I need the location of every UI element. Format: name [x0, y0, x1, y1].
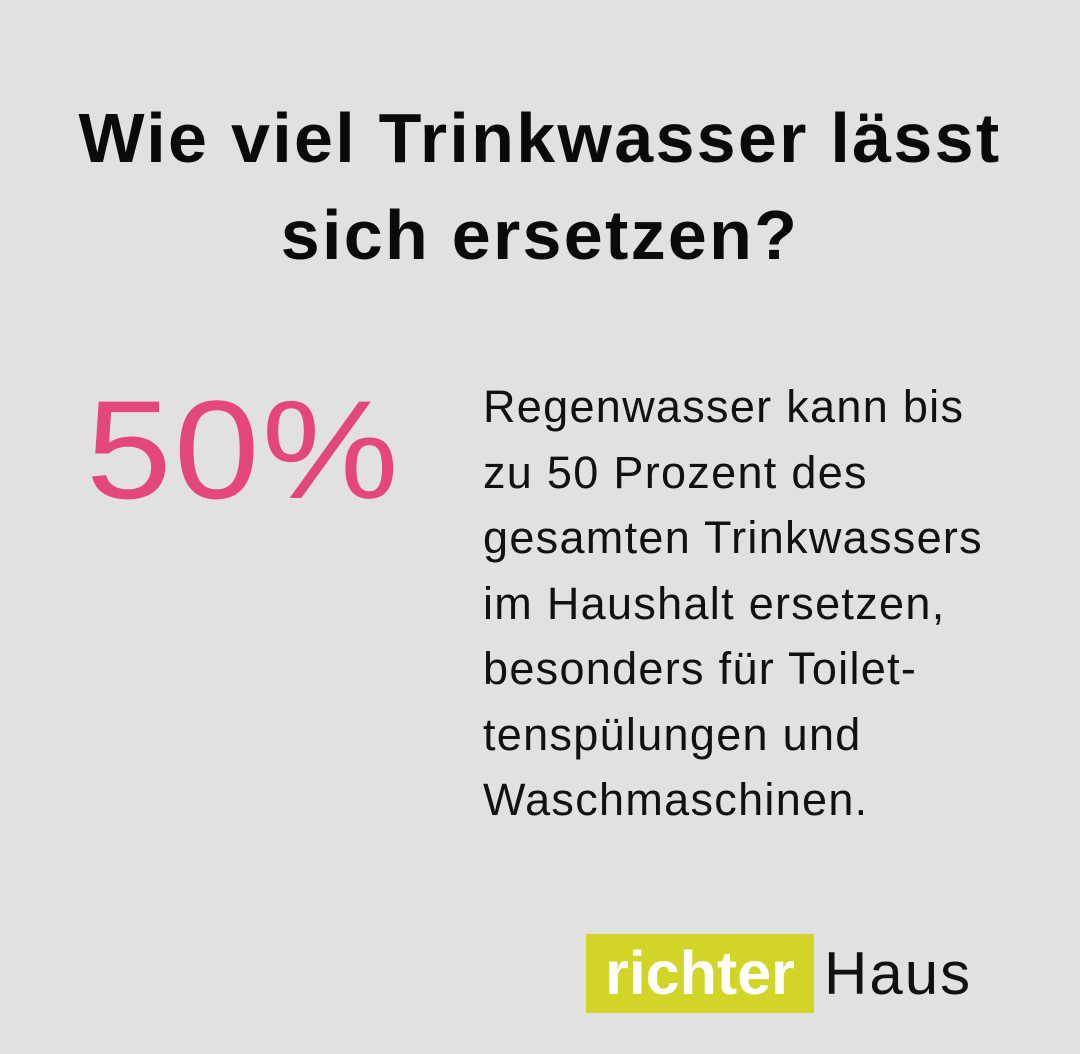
body text: zu 50 Prozent des — [483, 446, 868, 498]
title — [78, 99, 1001, 274]
body text: im Haushalt ersetzen, — [483, 578, 946, 628]
body text: gesamten Trinkwassers — [483, 512, 983, 563]
body text: Regenwasser kann bis — [483, 381, 964, 432]
title: Wie viel Trinkwasser lässt — [78, 99, 1001, 177]
body text: besonders für Toilet- — [483, 643, 917, 694]
logo: Haus — [824, 940, 972, 1007]
logo: richter — [605, 939, 795, 1007]
body text — [483, 381, 983, 825]
body text: Waschmaschinen. — [483, 774, 868, 825]
logo — [586, 934, 972, 1013]
title: sich ersetzen? — [281, 196, 799, 274]
big statistic: 50% — [86, 371, 401, 528]
body text: tenspülungen und — [483, 708, 862, 760]
